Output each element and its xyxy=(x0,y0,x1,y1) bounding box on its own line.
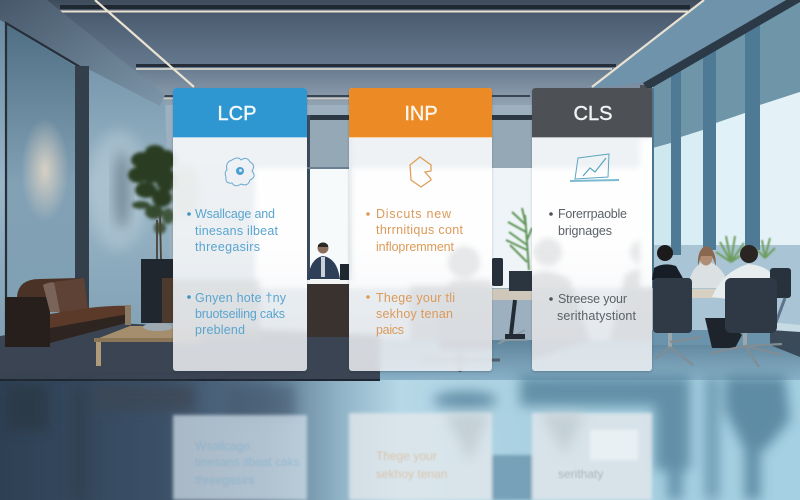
CLS bullet 1: Forerrpaoble xyxy=(558,207,627,221)
CLS bullet 2: Streese your xyxy=(558,292,627,306)
INP bullet 2: sekhoy tenan xyxy=(376,307,453,321)
sofa xyxy=(5,278,174,347)
CLS bullet 2 xyxy=(549,292,637,323)
floor reflections of cards: serithaty xyxy=(558,467,603,481)
LCP bullet 1: tinesans ilbeat xyxy=(195,224,279,238)
panel: CLS xyxy=(532,88,652,371)
panel: INP xyxy=(349,88,492,371)
floor reflections of cards: tinesans ilbeat caks xyxy=(195,455,300,469)
INP bullet 2 xyxy=(366,291,455,337)
INP bullet 2: Thege your tli xyxy=(376,291,455,305)
icon: CLS laptop chart xyxy=(570,154,619,181)
LCP header bar xyxy=(173,88,307,138)
CLS bullet 1 xyxy=(549,207,627,238)
coffee table xyxy=(94,323,200,366)
floor reflections of cards: sekhoy tenan xyxy=(376,467,447,481)
meeting group at right xyxy=(652,245,791,367)
left wall xyxy=(0,0,173,350)
INP bullet 1: Discuts new xyxy=(376,207,452,221)
icon: INP hexagon xyxy=(410,157,431,187)
CLS bullet 1: brignages xyxy=(558,224,612,238)
plant and stand xyxy=(114,145,200,323)
INP bullet 1 xyxy=(366,207,464,254)
panel: LCP xyxy=(173,88,307,371)
LCP bullet 2: preblend xyxy=(195,323,245,337)
conference table between cards xyxy=(492,258,532,344)
heading: INP: INP xyxy=(404,103,438,125)
rug xyxy=(0,322,380,380)
right windows xyxy=(640,0,800,357)
right window plants xyxy=(716,236,775,262)
LCP bullet 2: Gnyen hote †ny xyxy=(195,291,287,305)
ceiling xyxy=(0,0,800,120)
LCP bullet 1 xyxy=(187,207,279,254)
floor xyxy=(0,340,800,500)
LCP bullet 1: Wsallcage and xyxy=(195,207,275,221)
back wall and windows xyxy=(160,85,655,350)
heading: CLS: CLS xyxy=(574,103,612,125)
LCP bullet 1: threegasirs xyxy=(195,240,260,254)
INP bullet 1: thrrnitiqus cont xyxy=(376,223,464,237)
floor reflections of cards: threegasirs xyxy=(195,473,254,487)
LCP bullet 2 xyxy=(187,291,287,337)
LCP bullet 2: bruotseiling caks xyxy=(195,307,285,321)
icon: LCP cloud gear xyxy=(225,158,254,186)
INP header bar xyxy=(349,88,492,138)
manager at desk xyxy=(262,242,380,337)
floor reflections of cards: Wsallcage xyxy=(195,439,251,453)
floor reflections of cards: Thege your xyxy=(376,449,437,463)
floor reflections of cards xyxy=(173,413,652,500)
window plant centre xyxy=(506,208,532,270)
figures behind cards xyxy=(173,238,654,372)
INP bullet 2: paics xyxy=(376,323,404,337)
heading: LCP: LCP xyxy=(218,103,256,125)
INP bullet 1: inflopremment xyxy=(376,240,455,254)
CLS bullet 2: serithatystiont xyxy=(557,309,637,323)
CLS header bar xyxy=(532,88,652,138)
ceiling lights xyxy=(60,0,704,98)
